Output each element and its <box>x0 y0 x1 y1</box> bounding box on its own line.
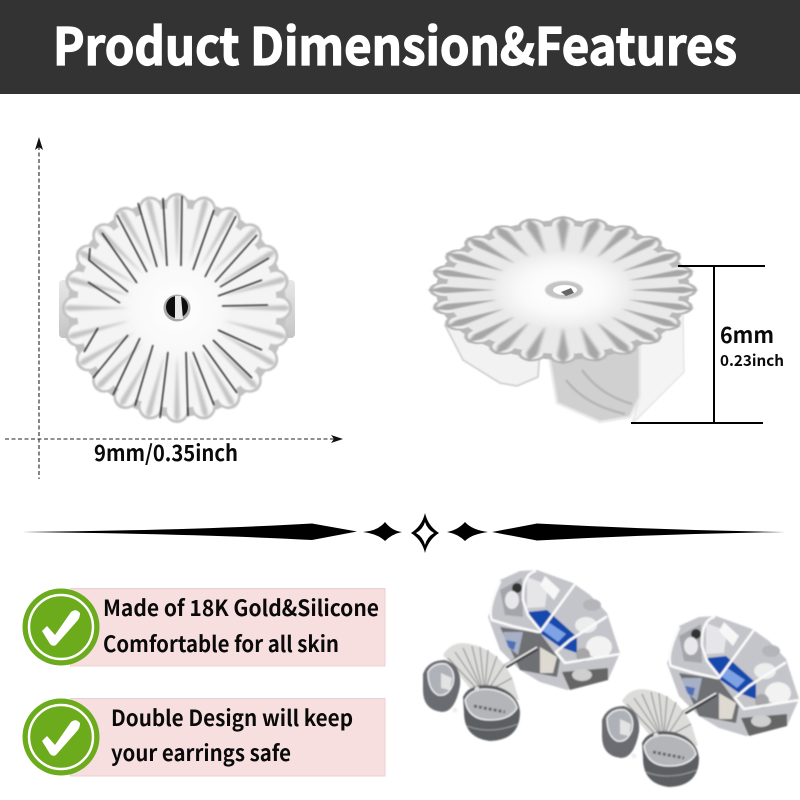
icon: front view flower back <box>59 193 295 423</box>
height dimension lines <box>631 266 765 423</box>
product photo: sapphire earrings with backs <box>423 570 799 787</box>
ornamental divider <box>22 513 785 553</box>
feature text: your earrings safe <box>111 736 291 768</box>
feature text: Double Design will keep <box>111 701 353 733</box>
icon: side view flower back <box>428 216 698 424</box>
title: Product Dimension&Features <box>53 6 737 80</box>
height label inches: 0.23inch <box>720 349 784 371</box>
header bar <box>0 0 800 94</box>
side view of earring back with height dimension <box>428 216 784 424</box>
icon: green check <box>22 588 100 666</box>
feature: double design <box>22 698 385 776</box>
dimension axes <box>5 146 336 479</box>
feature text: Made of 18K Gold&Silicone <box>103 591 379 623</box>
feature: gold and silicone <box>22 588 385 666</box>
feature text: Comfortable for all skin <box>103 627 339 659</box>
icon: green check <box>22 698 100 776</box>
front view of earring back with width dimension <box>5 137 343 479</box>
height label: 6mm <box>720 318 774 350</box>
width label: 9mm/0.35inch <box>94 436 238 468</box>
